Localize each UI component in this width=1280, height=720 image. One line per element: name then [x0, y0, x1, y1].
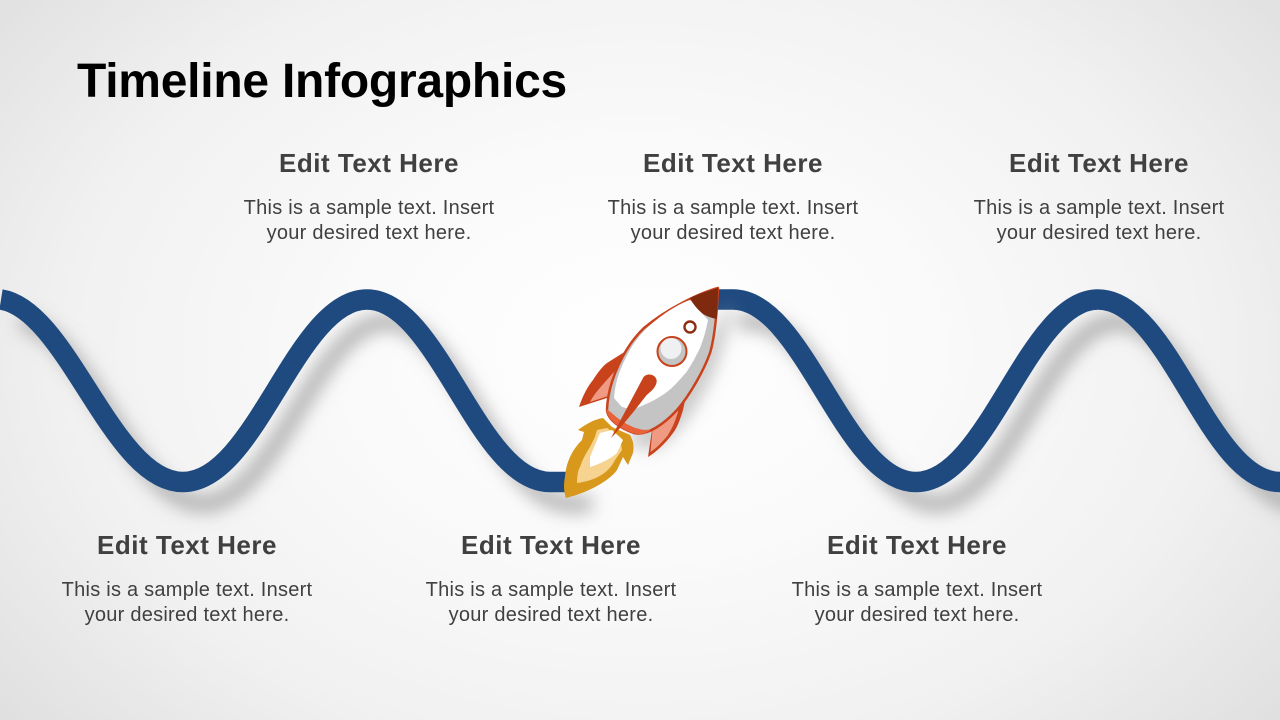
text block: bottom 3: This is a sample text. Insert [792, 579, 1042, 601]
flame [564, 418, 634, 498]
nose cone [690, 288, 718, 319]
text block: bottom 3: Edit Text Here [827, 530, 1007, 560]
body white highlight [614, 300, 708, 409]
text block: bottom 2: This is a sample text. Insert [426, 579, 676, 601]
text block: top 3: your desired text here. [997, 222, 1201, 244]
text block: top 1: This is a sample text. Insert [244, 197, 494, 219]
small porthole [684, 322, 696, 332]
text block: top 1 [244, 148, 494, 244]
rocket body [607, 288, 718, 433]
right fin [648, 396, 686, 457]
text block: top 2 [608, 148, 858, 244]
text block: top 2: This is a sample text. Insert [608, 197, 858, 219]
left fin [579, 351, 626, 407]
text block: top 1: Edit Text Here [279, 148, 459, 178]
text block: bottom 3: your desired text here. [815, 604, 1019, 626]
text block: top 3: Edit Text Here [1009, 148, 1189, 178]
text block: top 3 [974, 148, 1224, 244]
wave shadow [21, 322, 1280, 504]
text block: top 2: your desired text here. [631, 222, 835, 244]
text block: bottom 1: Edit Text Here [97, 530, 277, 560]
nozzle band [607, 410, 650, 434]
rocket shadow [625, 300, 732, 450]
text block: bottom 2: Edit Text Here [461, 530, 641, 560]
text block: bottom 2: your desired text here. [449, 604, 653, 626]
large porthole [658, 337, 686, 366]
text block: bottom 1: your desired text here. [85, 604, 289, 626]
text block: bottom 2 [426, 530, 676, 626]
text block: top 1: your desired text here. [267, 222, 471, 244]
text block: bottom 1 [62, 530, 312, 626]
text block: top 3: This is a sample text. Insert [974, 197, 1224, 219]
text block: bottom 1: This is a sample text. Insert [62, 579, 312, 601]
centre stripe [611, 374, 657, 438]
wave line right [718, 300, 1280, 482]
wave line left [1, 300, 572, 482]
icon: rocket [564, 288, 732, 498]
text block: bottom 3 [792, 530, 1042, 626]
title: Timeline Infographics [77, 55, 567, 108]
text block: top 2: Edit Text Here [643, 148, 823, 178]
